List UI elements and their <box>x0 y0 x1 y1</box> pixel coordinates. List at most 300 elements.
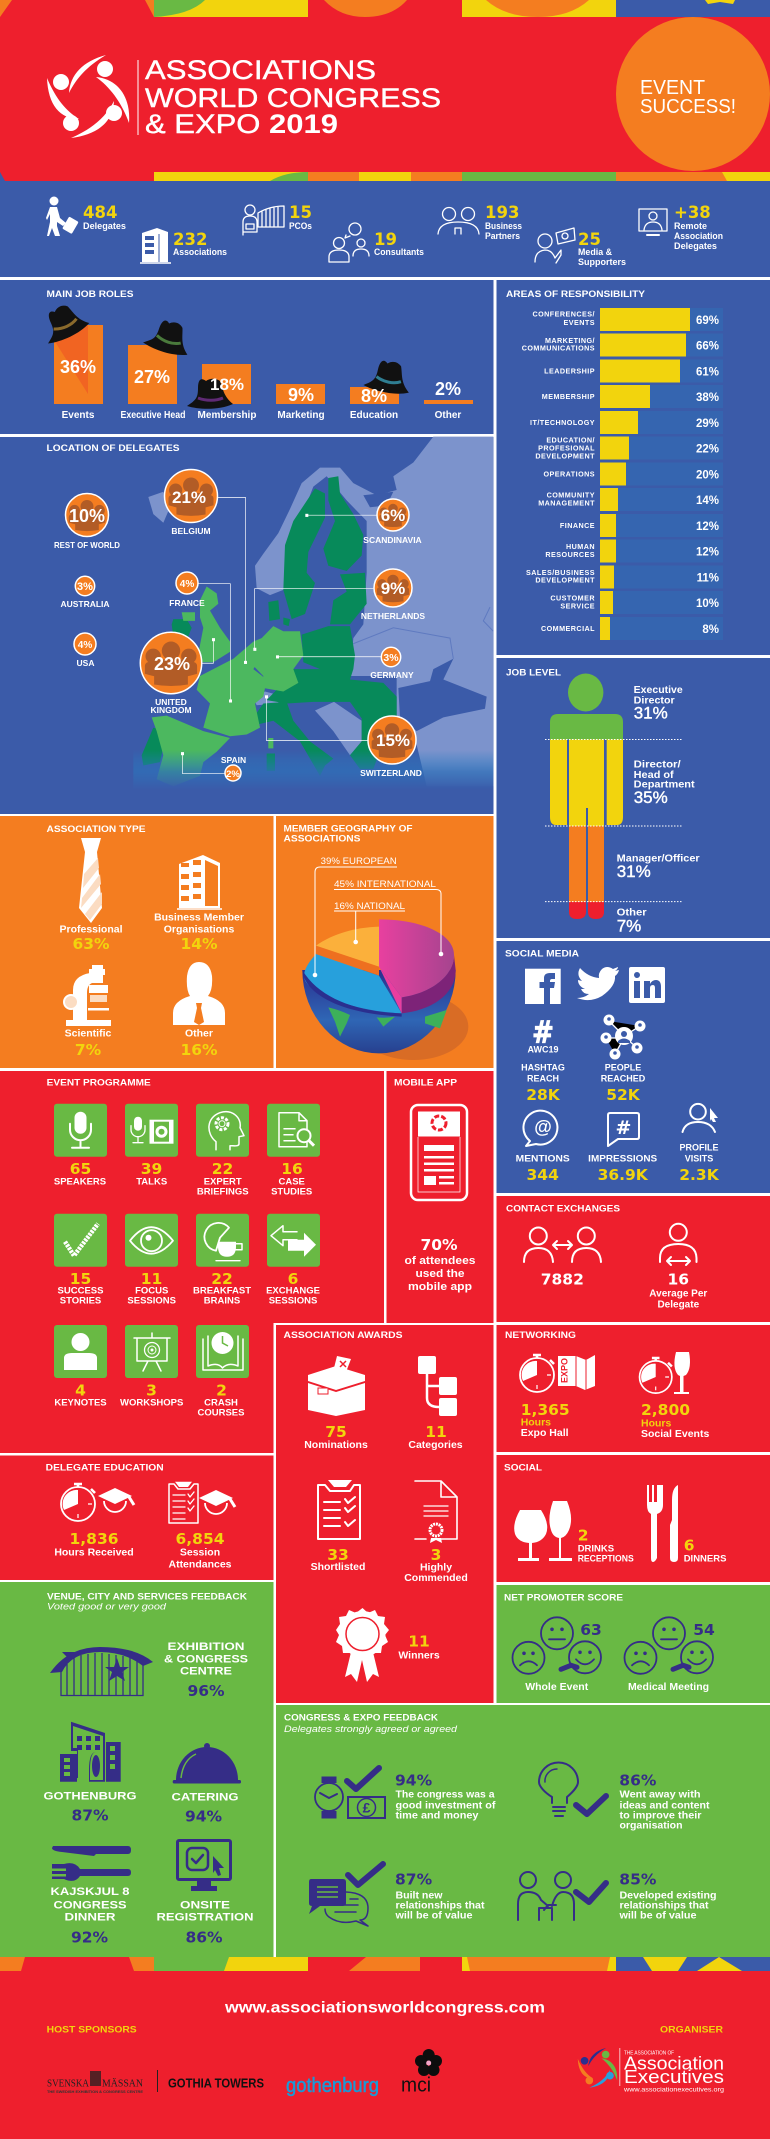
item: exchange sessions: SESSIONS <box>269 1295 317 1306</box>
label: other: 16% <box>180 1041 218 1059</box>
logo <box>47 55 129 138</box>
item: good investment: 94% <box>395 1772 433 1790</box>
bar chart: job roles: 2% <box>435 379 461 399</box>
marker: France: 4% <box>180 579 194 590</box>
stat: people reached: REACHED <box>601 1074 646 1084</box>
label: other: Other <box>185 1028 213 1040</box>
item: categories <box>408 1356 463 1451</box>
item: workshops: WORKSHOPS <box>120 1397 183 1408</box>
heading: ASSOCIATIONS <box>284 834 360 845</box>
bar chart: responsibilities: DEVELOPMENT <box>535 576 595 584</box>
item: exhibition and congress centre <box>50 1641 248 1700</box>
bar chart: responsibilities: 69% <box>696 315 719 327</box>
marker: rest of world: 10% <box>69 506 105 526</box>
bar chart: responsibilities: 20% <box>696 470 719 482</box>
item: Gothenburg: 87% <box>71 1807 109 1825</box>
bar chart: responsibilities: MEMBERSHIP <box>542 392 595 401</box>
stat: 70 percent <box>404 1236 476 1293</box>
marker: Spain: SPAIN <box>221 755 246 765</box>
item: highly commended: Commended <box>404 1572 468 1584</box>
stat: expo hall: Expo Hall <box>521 1427 569 1439</box>
stat: remote delegates: Delegates <box>674 241 717 251</box>
marker: Scandinavia <box>363 499 422 545</box>
item: highly commended: Highly <box>420 1562 452 1574</box>
heading <box>284 1713 458 1735</box>
stat: consultants: 19 <box>374 230 397 249</box>
item: ideas and content: 86% <box>619 1772 657 1790</box>
bar chart: responsibilities: 8% <box>702 624 719 636</box>
label: director / head of department <box>634 759 696 807</box>
logo: Svenska Massan: MÄSSAN <box>102 2078 143 2090</box>
stat: hashtag reach: 28K <box>526 1086 561 1104</box>
item: focus sessions <box>125 1214 178 1306</box>
stat: associations: 232 <box>173 230 207 249</box>
item: success stories <box>54 1214 107 1306</box>
heading: SOCIAL <box>504 1463 542 1474</box>
item: good investment: time and money <box>396 1810 479 1822</box>
logo: Gothenburg: gothenburg <box>286 2075 379 2097</box>
item: exchange sessions <box>266 1214 320 1306</box>
bar chart: job roles: 18% <box>210 375 244 394</box>
heading: CONTACT EXCHANGES <box>506 1204 620 1215</box>
marker: Germany: GERMANY <box>370 670 414 680</box>
marker: USA: USA <box>77 658 94 668</box>
item: shortlisted <box>311 1480 365 1573</box>
item: new relationships: relationships that <box>396 1900 485 1912</box>
stat: profile visits: VISITS <box>685 1154 713 1164</box>
heading: ASSOCIATION TYPE <box>46 824 146 835</box>
stat: dinners: 6 <box>684 1537 694 1555</box>
item: Kajskjul 8 congress dinner: CONGRESS <box>54 1899 126 1911</box>
logo: Association of Association Executives: Executives <box>624 2067 724 2087</box>
marker: France <box>169 572 205 608</box>
item: nominations <box>304 1356 368 1451</box>
bar chart: responsibilities: 11% <box>697 572 719 584</box>
stat: delegates: Delegates <box>83 221 126 231</box>
item: crash courses: COURSES <box>198 1407 244 1418</box>
bar chart: responsibilities: DEVELOPMENT <box>535 452 595 460</box>
label: professional: 63% <box>72 935 110 953</box>
score: whole event: 63 <box>580 1621 602 1639</box>
icon: microscope <box>64 965 111 1026</box>
logo: Svenska Massan <box>47 2071 143 2094</box>
heading: AREAS OF RESPONSIBILITY <box>506 289 646 300</box>
item: Kajskjul 8 congress dinner <box>50 1846 131 1946</box>
item: Kajskjul 8 congress dinner: DINNER <box>64 1912 116 1924</box>
bar chart: job roles: Membership <box>198 410 256 421</box>
marker: Australia: 3% <box>77 581 93 593</box>
item: exhibition and congress centre: & CONGRESS <box>164 1654 248 1666</box>
bar chart: responsibilities: SALES/BUSINESS <box>526 568 595 577</box>
label: manager / officer: Manager/Officer <box>617 854 700 865</box>
heading: organiser: ORGANISER <box>660 2025 723 2036</box>
item: workshops <box>120 1325 183 1408</box>
bar chart: responsibilities: EVENTS <box>564 318 595 327</box>
title <box>145 55 441 139</box>
stat: media and supporters: 25 <box>578 230 601 249</box>
stat: profile visits <box>679 1104 720 1184</box>
label: executive director: 31% <box>634 704 668 722</box>
bar chart: responsibilities: COMMUNICATIONS <box>522 344 595 352</box>
bar chart: job roles: Other <box>435 410 461 421</box>
stat: mentions: @ <box>534 1117 552 1137</box>
heading: MEMBER GEOGRAPHY OF <box>284 824 413 835</box>
label: director / head of department: 35% <box>634 788 668 807</box>
bar chart: responsibilities: IT/TECHNOLOGY <box>530 418 595 427</box>
stat: total exchanges: 7882 <box>541 1270 584 1288</box>
bar chart: responsibilities: EDUCATION/ <box>546 436 595 444</box>
panel: member geography of associations <box>276 816 494 1068</box>
bar chart: responsibilities: COMMUNITY <box>547 490 595 500</box>
heading: LOCATION OF DELEGATES <box>46 443 180 454</box>
item: good investment <box>315 1768 496 1822</box>
marker: Netherlands: 9% <box>381 579 405 598</box>
bar chart: responsibilities: CUSTOMER <box>550 594 595 602</box>
item: existing relationships <box>518 1871 716 1922</box>
label: 39% European: 39% EUROPEAN <box>321 856 397 867</box>
bar chart: responsibilities: 12% <box>696 546 719 558</box>
item: success stories: SUCCESS <box>58 1285 103 1296</box>
logo divider <box>138 60 139 135</box>
bar chart: responsibilities: LEADERSHIP <box>544 366 595 376</box>
stat: hours received: 1,836 <box>69 1530 119 1548</box>
item: speakers: 65 <box>70 1160 91 1178</box>
stat: dinners <box>647 1485 726 1565</box>
item: case studies <box>267 1104 320 1198</box>
stat: hashtag reach: AWC19 <box>527 1045 559 1055</box>
label: professional <box>59 924 123 953</box>
item: crash courses: CRASH <box>204 1397 238 1408</box>
icon: Twitter <box>577 967 619 1000</box>
logo: Association of Association Executives: THE ASSOCIATION OF <box>624 2051 675 2057</box>
stat: social events: Hours <box>641 1418 671 1430</box>
stat: mentions: MENTIONS <box>516 1154 570 1164</box>
label: business member organisations: Organisations <box>164 924 234 936</box>
item: existing relationships: 85% <box>619 1871 657 1889</box>
stat: consultants <box>329 223 424 262</box>
marker: United Kingdom <box>140 632 202 715</box>
title: & EXPO 2019 <box>145 109 338 139</box>
panel: mobile app <box>386 1071 494 1323</box>
item: breakfast brains: BRAINS <box>204 1295 240 1306</box>
item: success stories: 15 <box>70 1270 91 1288</box>
stat: 70 percent: used the <box>416 1268 464 1280</box>
marker: Scandinavia: SCANDINAVIA <box>363 535 422 545</box>
item: categories: 11 <box>425 1423 447 1441</box>
item: breakfast brains <box>193 1214 251 1306</box>
item: existing relationships: Developed existing <box>620 1890 716 1902</box>
heading: NET PROMOTER SCORE <box>504 1593 623 1604</box>
bar chart: responsibilities: MANAGEMENT <box>538 498 595 508</box>
bar chart: responsibilities: 66% <box>696 340 719 352</box>
panel: main job roles <box>0 280 494 434</box>
item: speakers <box>54 1104 107 1188</box>
item: exchange sessions: EXCHANGE <box>266 1285 320 1296</box>
stat: average per delegate: Average Per <box>649 1289 707 1300</box>
stat: PCOs: PCOs <box>289 221 312 231</box>
item: case studies: STUDIES <box>271 1187 312 1198</box>
marker: United Kingdom: UNITED <box>155 697 187 707</box>
stat: expo hall <box>520 1355 595 1439</box>
item: ideas and content <box>539 1762 710 1832</box>
bar chart: responsibilities: MARKETING/ <box>545 336 595 345</box>
label: business member organisations: Business Member <box>154 912 244 924</box>
stat: delegates <box>46 196 126 236</box>
marker: rest of world <box>54 494 120 550</box>
heading: SOCIAL MEDIA <box>505 949 579 960</box>
event success badge: EVENT <box>640 77 705 99</box>
label: other: 7% <box>617 916 641 936</box>
score: whole event <box>512 1617 602 1693</box>
bar chart: job roles: 9% <box>288 385 314 405</box>
label: 45% International <box>334 879 443 956</box>
marker: Spain: 2% <box>226 769 240 780</box>
label: manager / officer <box>617 854 700 881</box>
item: keynotes: KEYNOTES <box>54 1397 107 1408</box>
bar chart: job roles: Executive Head <box>120 410 186 421</box>
stat: expo hall: 1,365 <box>521 1401 570 1419</box>
label: director / head of department: Director/ <box>634 759 681 770</box>
stat: total exchanges <box>524 1228 601 1288</box>
icon: tie <box>79 838 102 923</box>
item: keynotes: 4 <box>75 1382 86 1400</box>
label: 45% International: 45% INTERNATIONAL <box>334 879 436 890</box>
label: director / head of department: Department <box>634 780 696 791</box>
marker: rest of world: REST OF WORLD <box>54 540 120 550</box>
label: business member organisations: 14% <box>180 935 218 953</box>
logo: Association of Association Executives: Association <box>624 2053 724 2073</box>
heading: NETWORKING <box>505 1330 576 1341</box>
item: good investment: The congress was a <box>396 1789 495 1801</box>
label: 16% National <box>334 901 405 944</box>
stat: 70 percent: 70% <box>420 1236 458 1254</box>
marker: Australia <box>60 576 110 609</box>
heading: JOB LEVEL <box>506 668 561 678</box>
stat: average per delegate <box>649 1224 707 1311</box>
stat: consultants: Consultants <box>374 247 424 257</box>
stat: session attendances <box>168 1482 235 1571</box>
label: scientific <box>65 1028 111 1059</box>
logo divider <box>157 2070 158 2092</box>
marker: Belgium: BELGIUM <box>171 526 211 536</box>
icon: mobile phone <box>411 1105 467 1200</box>
marker: Scandinavia: 6% <box>381 506 405 525</box>
stat: PCOs <box>243 203 312 235</box>
bar chart: job roles: 8% <box>361 386 387 406</box>
item: case studies: CASE <box>278 1177 305 1188</box>
item: catering <box>172 1743 241 1826</box>
bar chart: responsibilities: 14% <box>696 495 719 507</box>
marker: USA: 4% <box>78 640 92 651</box>
stat: session attendances: Attendances <box>168 1559 232 1571</box>
title: WORLD CONGRESS <box>145 83 441 113</box>
marker: Netherlands: NETHERLANDS <box>361 611 425 621</box>
item: winners <box>336 1608 440 1682</box>
stat: media and supporters <box>535 228 626 267</box>
label: 39% European <box>313 856 397 977</box>
stat: session attendances: Session <box>180 1547 220 1559</box>
stat: social events: 2,800 <box>641 1401 690 1419</box>
item: onsite registration: 86% <box>185 1928 223 1946</box>
bar chart: responsibilities: RESOURCES <box>545 550 595 559</box>
marker: Belgium <box>164 470 218 536</box>
bar chart: responsibilities: SERVICE <box>560 602 595 610</box>
stat: expo hall: Hours <box>521 1417 551 1429</box>
stat: mentions <box>516 1111 570 1184</box>
item: focus sessions: SESSIONS <box>127 1295 176 1306</box>
bar chart: responsibilities: 22% <box>696 444 719 456</box>
bar chart: responsibilities: 61% <box>696 366 719 378</box>
marker: Spain <box>221 755 246 781</box>
item: focus sessions: 11 <box>141 1270 162 1288</box>
marker: Switzerland <box>360 716 422 778</box>
panel: attendance stats <box>0 181 770 277</box>
stat: PCOs: 15 <box>289 203 312 222</box>
item: case studies: 16 <box>281 1160 303 1178</box>
item: highly commended <box>404 1481 468 1584</box>
item: crash courses: 2 <box>216 1382 227 1400</box>
marker: Switzerland: 15% <box>376 731 410 750</box>
item: existing relationships: will be of value <box>618 1910 697 1922</box>
marker: United Kingdom: 23% <box>154 654 190 674</box>
logo: Svenska Massan: THE SWEDISH EXHIBITION & CONGRESS CENTRE <box>47 2090 143 2094</box>
bar chart: job roles: 36% <box>60 357 96 377</box>
label: scientific: Scientific <box>65 1028 111 1040</box>
score: medical meeting <box>624 1617 715 1693</box>
heading: host sponsors: HOST SPONSORS <box>47 2025 137 2036</box>
stat: impressions <box>588 1113 657 1184</box>
item: workshops: 3 <box>146 1382 157 1400</box>
item: new relationships: 87% <box>395 1871 433 1889</box>
bar chart: responsibilities: 29% <box>696 418 719 430</box>
bottom colour strip <box>0 1957 770 1971</box>
panel: location of delegates <box>0 437 494 814</box>
label: manager / officer: 31% <box>617 862 651 881</box>
stat: remote delegates: +38 <box>674 203 711 222</box>
item: expert briefings: BRIEFINGS <box>197 1187 249 1198</box>
item: keynotes <box>54 1325 107 1408</box>
item: Kajskjul 8 congress dinner: 92% <box>71 1928 109 1946</box>
logo: MCI <box>401 2049 442 2097</box>
panel: delegate education <box>0 1456 274 1580</box>
label: director / head of department: Head of <box>634 770 675 781</box>
stat: business partners: Partners <box>485 231 520 241</box>
score: whole event: Whole Event <box>525 1681 589 1693</box>
bar chart: responsibilities: OPERATIONS <box>544 470 595 478</box>
label: executive director: Executive <box>634 685 683 696</box>
panel: net promoter score <box>496 1585 770 1703</box>
stat: remote delegates <box>639 203 723 251</box>
bar chart: responsibilities: 12% <box>696 521 719 533</box>
stat: 70 percent: of attendees <box>404 1255 476 1267</box>
heading: CONGRESS & EXPO FEEDBACK <box>284 1713 438 1724</box>
bar chart: responsibilities: COMMERCIAL <box>541 624 595 633</box>
marker: France: FRANCE <box>169 598 205 608</box>
item: talks <box>125 1104 178 1188</box>
panel: job level <box>496 658 770 938</box>
stat: business partners: Business <box>485 221 522 231</box>
item: ideas and content: Went away with <box>620 1789 700 1801</box>
item: ideas and content: to improve their <box>620 1810 702 1822</box>
item: existing relationships: relationships that <box>620 1900 709 1912</box>
label: 16% National: 16% NATIONAL <box>334 901 405 912</box>
label: other <box>180 1028 218 1059</box>
stat: associations <box>140 228 227 263</box>
heading: EVENT PROGRAMME <box>47 1078 151 1089</box>
heading: MAIN JOB ROLES <box>46 289 134 300</box>
item: ideas and content: ideas and content <box>620 1800 710 1812</box>
bar chart: job roles: Education <box>350 410 398 421</box>
item: onsite registration: ONSITE <box>180 1899 230 1911</box>
item: catering: CATERING <box>172 1792 238 1804</box>
stat: impressions: IMPRESSIONS <box>588 1154 657 1164</box>
panel: venue, city and services feedback <box>0 1582 274 1957</box>
logo: Association of Association Executives <box>578 2048 724 2093</box>
marker: Switzerland: SWITZERLAND <box>360 768 422 778</box>
item: new relationships: will be of value <box>394 1910 473 1922</box>
panel: event programme <box>0 1071 384 1453</box>
bar chart: responsibilities: 10% <box>696 598 719 610</box>
stat: remote delegates: Remote <box>674 221 707 231</box>
item: new relationships: Built new <box>396 1890 443 1902</box>
marker: USA <box>74 633 96 668</box>
logo: MCI: mci <box>401 2075 431 2097</box>
stat: media and supporters: Supporters <box>578 257 626 267</box>
bar chart: job roles: Events <box>62 410 95 421</box>
marker: United Kingdom: KINGDOM <box>150 705 192 715</box>
stat: hashtag reach: # <box>532 1015 554 1051</box>
item: shortlisted: 33 <box>327 1546 349 1564</box>
stat: business partners: 193 <box>485 203 519 222</box>
item: Kajskjul 8 congress dinner: KAJSKJUL 8 <box>50 1886 130 1898</box>
heading: Delegates strongly agreed or agreed <box>284 1724 458 1735</box>
bar chart: responsibilities: HUMAN <box>566 542 595 551</box>
website address: www.associationsworldcongress.com <box>224 2000 545 2017</box>
stat: social events: Social Events <box>641 1428 709 1440</box>
icon: LinkedIn <box>629 967 665 1003</box>
stat: hours received: Hours Received <box>54 1547 134 1559</box>
stat: media and supporters: Media & <box>578 247 612 257</box>
item: ideas and content: organisation <box>620 1820 682 1832</box>
icon: businessman silhouette <box>173 962 225 1025</box>
stat: hours received <box>54 1484 134 1559</box>
label: other: Other <box>617 908 647 918</box>
stat: 70 percent: mobile app <box>408 1281 472 1293</box>
heading: ASSOCIATION AWARDS <box>284 1330 402 1341</box>
item: speakers: SPEAKERS <box>54 1177 106 1188</box>
stat: impressions: # <box>616 1117 631 1139</box>
marker: Australia: AUSTRALIA <box>60 599 110 609</box>
marker: Netherlands <box>361 569 425 621</box>
stat: expo hall: EXPO <box>560 1358 570 1383</box>
item: Gothenburg <box>44 1722 136 1825</box>
heading: Voted good or very good <box>47 1601 167 1612</box>
stat: associations: Associations <box>173 247 227 257</box>
stat: impressions: 36.9K <box>598 1166 649 1184</box>
bar chart: job roles <box>36 298 473 421</box>
item: good investment: good investment of <box>396 1800 496 1812</box>
stat: remote delegates: Association <box>674 231 723 241</box>
bar chart: responsibilities: PROFESIONAL <box>538 444 595 452</box>
bar chart: responsibilities: CONFERENCES/ <box>532 310 595 318</box>
score: medical meeting: Medical Meeting <box>628 1681 709 1693</box>
label: professional: Professional <box>59 924 123 936</box>
item: exhibition and congress centre: CENTRE <box>180 1666 232 1678</box>
pie chart on globe <box>302 919 468 1060</box>
bar chart: responsibilities: FINANCE <box>560 521 595 530</box>
stat: average per delegate: 16 <box>668 1270 689 1288</box>
stat: session attendances: 6,854 <box>175 1530 225 1548</box>
